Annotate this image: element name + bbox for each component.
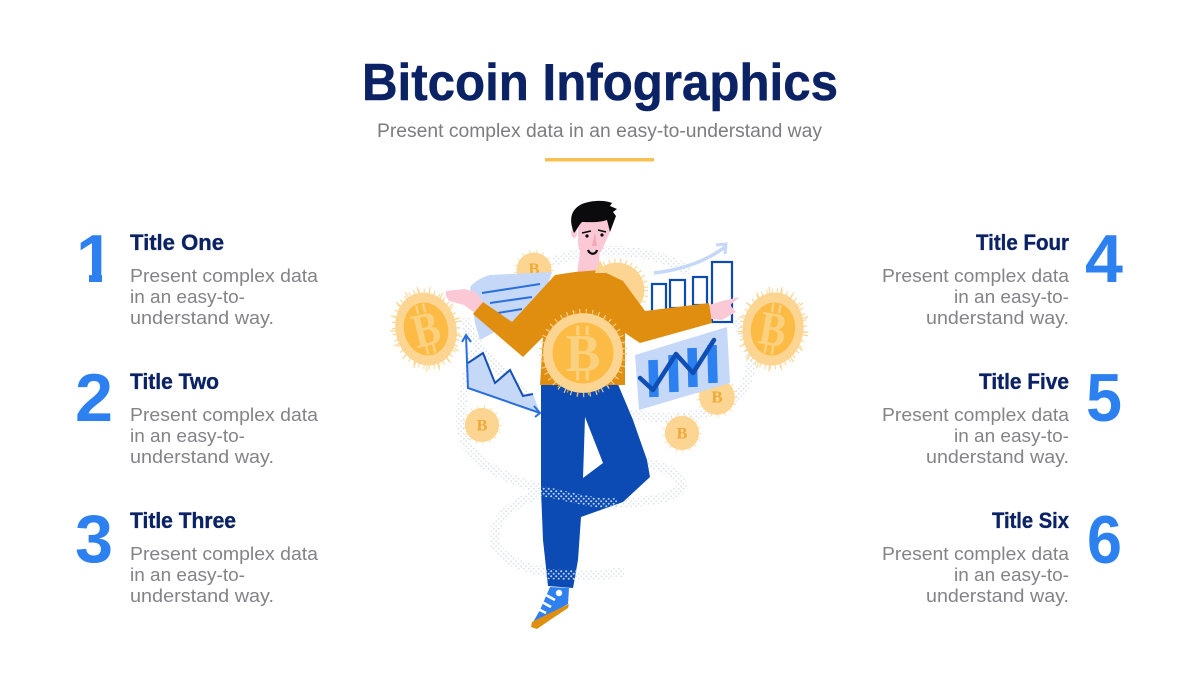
text 6: in an easy-to- (954, 564, 1069, 585)
heading 5: Title Five (979, 369, 1069, 394)
item 2 (75, 360, 319, 467)
leg gap (583, 417, 603, 478)
eyes and mouth (582, 230, 606, 254)
dotted swirl (461, 251, 751, 575)
coin: centre: B (565, 325, 601, 383)
coin: behind shoulder (589, 262, 645, 318)
coin: large left: B (406, 299, 446, 359)
heading 4: Title Four (976, 230, 1069, 255)
collar (595, 260, 606, 273)
text 6: understand way. (926, 585, 1069, 606)
number 1: 1 (76, 221, 114, 297)
number 4: 4 (1085, 221, 1123, 297)
chart: falling line (462, 335, 540, 417)
coin: bottom left small: B (477, 416, 488, 434)
text 4: in an easy-to- (954, 286, 1069, 307)
text 2: understand way. (130, 446, 274, 467)
coin: large right: B (755, 300, 791, 358)
coin: lower right small: B (711, 388, 723, 407)
shoe (531, 587, 569, 629)
text 3: understand way. (130, 585, 274, 606)
coin: lower right small (699, 379, 735, 415)
text 5 (882, 404, 1070, 467)
number 2: 2 (75, 360, 113, 436)
title: Bitcoin Infographics (362, 54, 838, 112)
panel: left lines (470, 272, 552, 340)
item 5 (882, 360, 1122, 467)
trouser dots (541, 491, 617, 575)
text 2: in an easy-to- (130, 425, 245, 446)
text 1 (130, 265, 319, 328)
heading 6: Title Six (992, 508, 1070, 533)
figure: person (446, 201, 740, 629)
text 1: Present complex data (130, 265, 319, 286)
text 5: understand way. (926, 446, 1069, 467)
item 6 (882, 502, 1122, 606)
text 6 (882, 543, 1070, 606)
coin: bottom right small: B (677, 424, 688, 442)
right hand (709, 297, 740, 320)
text 3: in an easy-to- (130, 564, 245, 585)
nose (592, 232, 597, 246)
heading 3: Title Three (130, 508, 236, 533)
text 5: Present complex data (882, 404, 1070, 425)
text 3: Present complex data (130, 543, 319, 564)
ear (571, 228, 577, 238)
item 1 (80, 234, 318, 328)
neck (577, 250, 600, 274)
number 3: 3 (75, 501, 113, 577)
heading 1: Title One (130, 230, 224, 255)
text 2: Present complex data (130, 404, 319, 425)
sweater (473, 270, 712, 385)
trousers (541, 382, 650, 588)
text 2 (130, 404, 319, 467)
title underline (545, 158, 654, 162)
coin: large right (736, 286, 810, 372)
coin: top left small (516, 252, 552, 288)
text 4: understand way. (926, 307, 1069, 328)
head (578, 215, 612, 262)
text 5: in an easy-to- (954, 425, 1069, 446)
coin: centre (537, 307, 629, 399)
item 4 (882, 221, 1123, 328)
panel: zigzag chart (635, 327, 730, 410)
text 1: understand way. (130, 307, 274, 328)
left hand (446, 289, 483, 313)
text 1: in an easy-to- (130, 286, 245, 307)
text 4: Present complex data (882, 265, 1070, 286)
item 3 (75, 501, 319, 606)
text 3 (130, 543, 319, 606)
number 5: 5 (1086, 360, 1122, 436)
coin: large left (387, 285, 465, 373)
number 6: 6 (1087, 502, 1122, 578)
subtitle: Present complex data in an easy-to-understand way (377, 121, 822, 142)
text 6: Present complex data (882, 543, 1070, 564)
chart: bars with arrow (652, 244, 732, 322)
central illustration (387, 201, 810, 629)
coin: bottom right small (664, 415, 700, 451)
heading 2: Title Two (130, 369, 219, 394)
text 4 (882, 265, 1070, 328)
coin: bottom left small (464, 407, 500, 443)
coin: top left small: B (528, 260, 540, 279)
hair (571, 201, 617, 233)
